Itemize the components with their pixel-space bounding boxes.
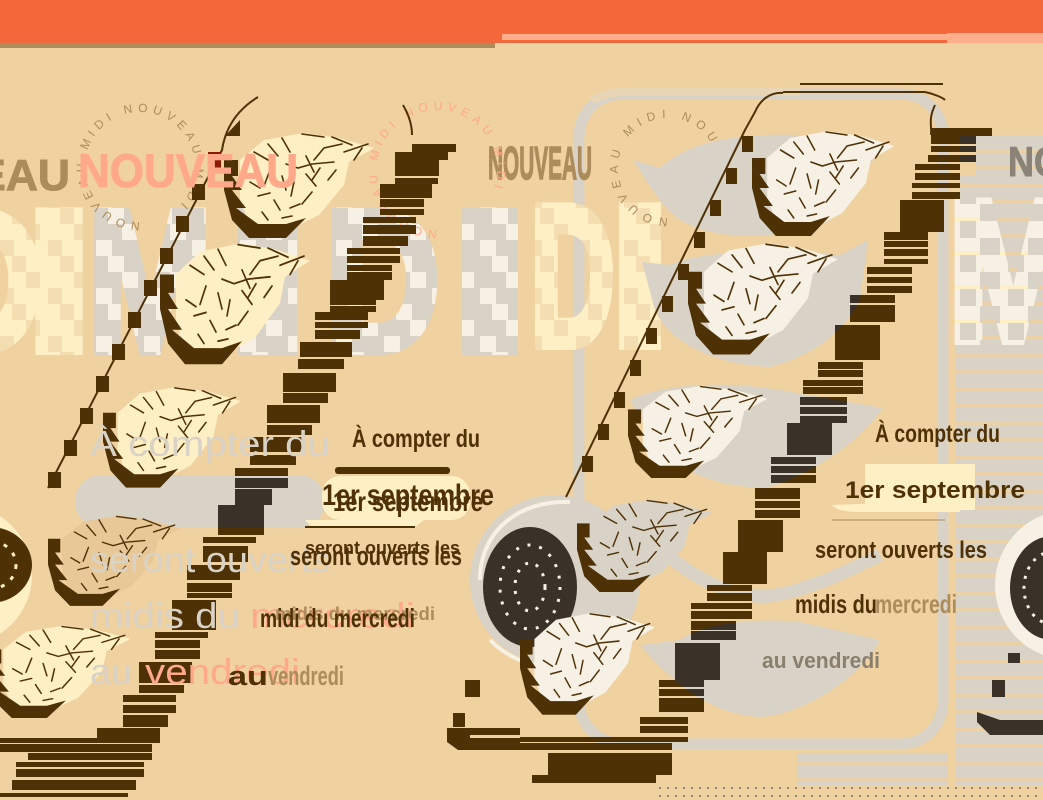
text block left dark: midis du mercredi [275,604,435,624]
bowl 9 gray [577,500,712,592]
bowl 10 [520,613,655,715]
text block right dark: seront ouverts les [815,537,987,564]
panel: phone outline gray [579,92,943,744]
bowl 5 [0,626,130,718]
heading: NOUVEAU salmon: NOUVEAU [78,144,298,197]
text block right dark: midis du [795,589,877,619]
circular stamp tan left: NOUVEAU MIDI NOUVEAU MIDI [76,104,204,230]
text block right dark: mercredi [875,589,957,619]
bowl 3 [103,387,241,488]
diagonal checker outline right [566,84,945,497]
gray leaf shapes [75,135,883,717]
text block left dark: seront ouverts les [290,541,462,571]
text block gray: au [90,651,132,692]
text block gray: midis du [90,595,240,636]
text block left dark: 1er septembre [322,479,494,512]
big word MIDI gray: D [325,170,440,393]
panel: striped background right [656,135,1043,798]
diagonal stepped stripes over gray [218,135,992,700]
circle: plate centre [470,495,640,667]
text block left dark: midi du mercredi [260,603,415,633]
text block left dark: 1er septembre [333,486,483,517]
text block gray [90,423,330,692]
bowl 8 [628,386,768,478]
text block gray: À compter du [90,423,330,464]
big word MIDI cream left: I [25,170,93,393]
header band [0,0,1043,48]
diagonal checker outline left [48,97,412,488]
text block right dark [762,419,1025,673]
text block left dark [228,424,494,691]
big word MIDI cream centre: D [530,165,615,388]
big word MIDI gray: I [450,170,530,393]
text highlights salmon: vendredi [145,651,300,692]
big word MIDI gray [88,170,530,393]
bowl 1 [224,133,374,238]
circular stamp tan centre: NOUVEAU MIDI NOUVEAU [610,110,718,226]
date pill left [305,467,470,527]
text block right dark: À compter du [875,419,1000,448]
diagonal stepped stripes [0,128,992,797]
text block left dark: au [228,661,268,691]
text: NOUVEAU [488,137,592,189]
text block right dark: au vendredi [762,648,880,673]
text block left dark: seront ouverts les [305,538,460,558]
text block right dark: 1er septembre [845,477,1025,504]
circle: plate right [977,510,1043,735]
big word MIDI cream centre: I [610,165,670,388]
bowl 4 faint [48,516,180,606]
text highlights salmon [145,595,415,692]
text highlights salmon: mercredi [250,595,415,636]
text block gray: seront ouverts [90,539,330,580]
big word MIDI gray: I [225,170,310,393]
text block left dark: vendredi [268,661,344,691]
circular stamp salmon: NOUVEAU MIDI NOUVEAU MIDI [369,102,506,238]
big word MIDI gray: M [88,170,212,393]
bowl 7 [688,243,838,354]
bowl 6 [752,131,894,236]
text block left dark: À compter du [352,424,480,453]
bowl 2 [160,243,310,364]
bottom corner outline [447,680,520,750]
circle: plate left [0,505,32,645]
date block right [832,464,975,520]
